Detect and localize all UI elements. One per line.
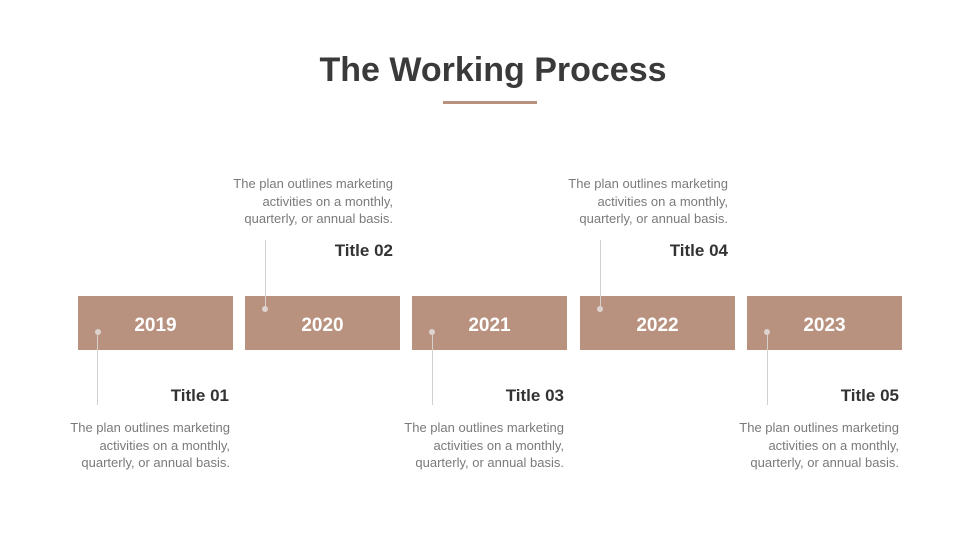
connector 2020 bbox=[265, 240, 266, 310]
heading Title 05: Title 05 bbox=[841, 386, 899, 405]
text 02: quarterly, or annual basis. bbox=[244, 211, 393, 226]
text 02: activities on a monthly, bbox=[262, 194, 393, 208]
text 01: The plan outlines marketing bbox=[70, 420, 230, 435]
text 02 bbox=[233, 176, 393, 226]
text 04: quarterly, or annual basis. bbox=[579, 211, 728, 226]
text 03: activities on a monthly, bbox=[433, 438, 564, 452]
step 2023 bbox=[739, 296, 902, 470]
connector 2021 bbox=[432, 333, 433, 405]
text 03 bbox=[404, 420, 564, 470]
dot 2019 bbox=[95, 329, 101, 335]
text 01: quarterly, or annual basis. bbox=[81, 455, 230, 470]
year box 2019: 2019 bbox=[134, 315, 177, 336]
year box 2023: 2023 bbox=[803, 315, 846, 336]
step 2021 bbox=[404, 296, 567, 470]
year box 2020 bbox=[245, 296, 400, 350]
text 04: The plan outlines marketing bbox=[568, 176, 728, 191]
text 05: activities on a monthly, bbox=[768, 438, 899, 452]
dot 2023 bbox=[764, 329, 770, 335]
year box 2021 bbox=[412, 296, 567, 350]
year box 2019 bbox=[78, 296, 233, 350]
connector 2023 bbox=[767, 333, 768, 405]
dot 2021 bbox=[429, 329, 435, 335]
dot 2020 bbox=[262, 306, 268, 312]
heading Title 02: Title 02 bbox=[335, 241, 393, 260]
year box 2020: 2020 bbox=[301, 315, 344, 336]
text 03: quarterly, or annual basis. bbox=[415, 455, 564, 470]
connector 2022 bbox=[600, 240, 601, 310]
text 01: activities on a monthly, bbox=[99, 438, 230, 452]
text 05: quarterly, or annual basis. bbox=[750, 455, 899, 470]
heading Title 01: Title 01 bbox=[171, 386, 229, 405]
title: The Working Process bbox=[319, 51, 667, 89]
text 01 bbox=[70, 420, 230, 470]
text 04 bbox=[568, 176, 728, 226]
title underline bbox=[443, 101, 537, 104]
text 05: The plan outlines marketing bbox=[739, 420, 899, 435]
text 05 bbox=[739, 420, 899, 470]
step 2022 bbox=[568, 176, 735, 350]
year box 2023 bbox=[747, 296, 902, 350]
dot 2022 bbox=[597, 306, 603, 312]
connector 2019 bbox=[97, 333, 98, 405]
step 2019 bbox=[70, 296, 233, 470]
year box 2022: 2022 bbox=[636, 315, 679, 336]
text 04: activities on a monthly, bbox=[597, 194, 728, 208]
year box 2022 bbox=[580, 296, 735, 350]
step 2020 bbox=[233, 176, 400, 350]
text 02: The plan outlines marketing bbox=[233, 176, 393, 191]
year box 2021: 2021 bbox=[468, 315, 511, 336]
heading Title 03: Title 03 bbox=[506, 386, 564, 405]
heading Title 04: Title 04 bbox=[670, 241, 728, 260]
text 03: The plan outlines marketing bbox=[404, 420, 564, 435]
